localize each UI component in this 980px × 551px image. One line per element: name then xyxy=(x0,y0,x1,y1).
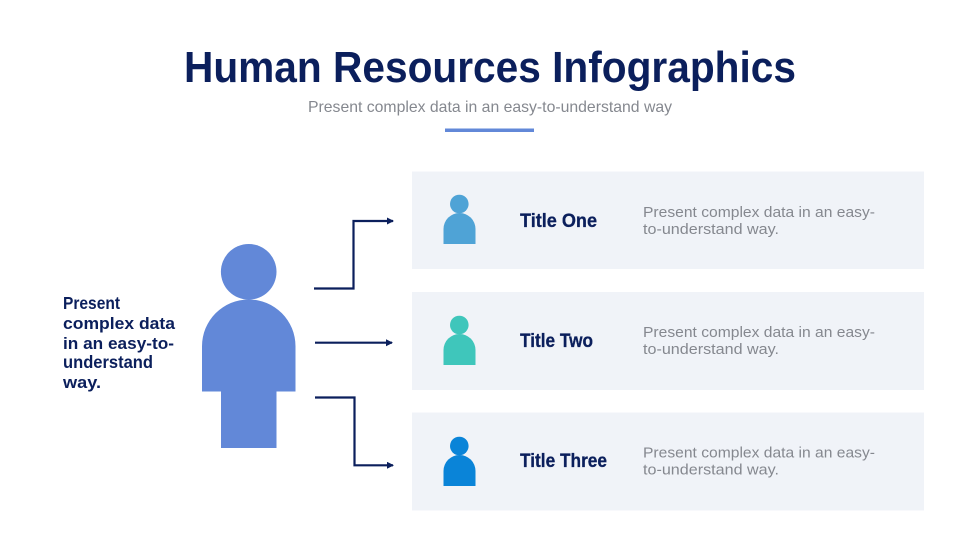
text: description two xyxy=(643,324,875,358)
panel: title two xyxy=(412,292,924,390)
text: description three: to-understand way. xyxy=(643,462,779,478)
text: description three xyxy=(643,444,875,478)
heading: title one: Title One xyxy=(520,211,597,232)
text: description one: to-understand way. xyxy=(643,221,779,238)
left description: understand xyxy=(63,352,153,372)
arrow: to title two xyxy=(315,342,392,344)
left description: Present xyxy=(63,293,120,313)
text: description two: Present complex data in an easy- xyxy=(643,324,875,341)
icon: person two xyxy=(444,316,476,365)
left description: complex data xyxy=(63,314,176,333)
panel: title one xyxy=(412,172,924,269)
arrow: to title one xyxy=(314,221,393,288)
text: description one: Present complex data in an easy- xyxy=(643,204,875,221)
icon: large person xyxy=(202,244,296,448)
title: Human Resources Infographics xyxy=(184,43,796,92)
icon: person one xyxy=(444,195,476,244)
title underline xyxy=(445,128,534,132)
left description: in an easy-to- xyxy=(63,334,174,353)
left description xyxy=(62,293,176,392)
text: description two: to-understand way. xyxy=(643,341,779,358)
text: description one xyxy=(643,204,875,238)
heading: title two: Title Two xyxy=(520,331,593,352)
heading: title three: Title Three xyxy=(520,451,607,472)
panel: title three xyxy=(412,412,924,510)
text: description three: Present complex data in an easy- xyxy=(643,444,875,462)
arrow: to title three xyxy=(315,398,393,465)
icon: person three xyxy=(444,437,476,486)
subtitle: Present complex data in an easy-to-understand way xyxy=(308,99,672,116)
left description: way. xyxy=(62,373,101,392)
